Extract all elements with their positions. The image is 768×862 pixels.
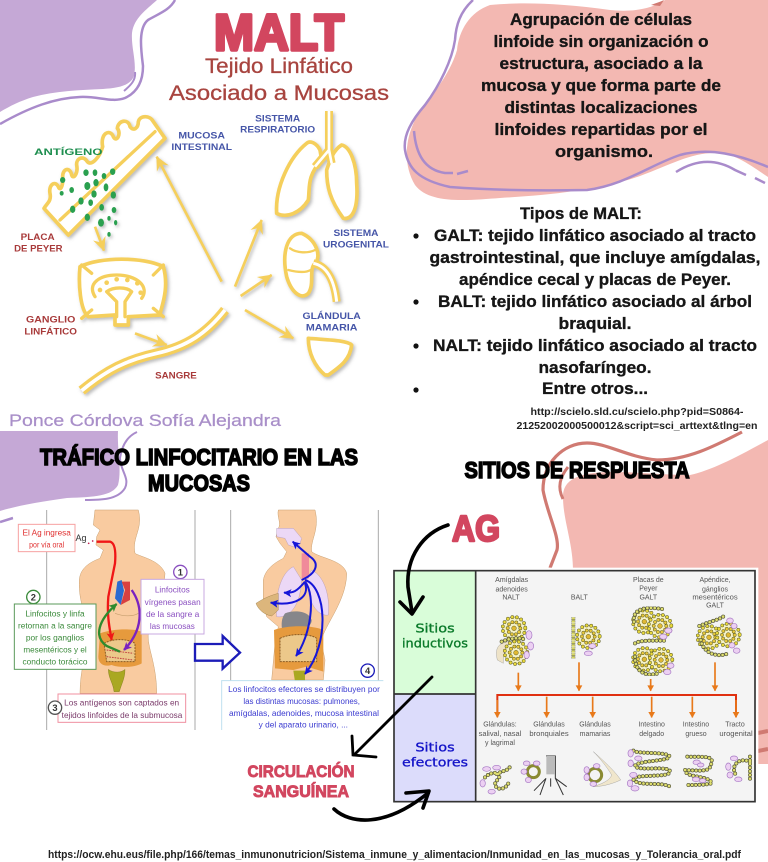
source link 1: http://scielo.sld.cu/scielo.php?pid=S0864- bbox=[530, 407, 744, 418]
icon: blood vessel bbox=[82, 310, 225, 391]
author name: Ponce Córdova Sofía Alejandra bbox=[9, 411, 282, 430]
column labels: Glándulas bbox=[579, 722, 611, 729]
diagram labels: SISTEMA bbox=[255, 114, 301, 124]
definition text: linfoide sin organización o bbox=[494, 32, 708, 51]
heart bbox=[115, 580, 138, 616]
column labels: BALT bbox=[571, 594, 589, 601]
callout: step 2: mesentéricos y el bbox=[23, 645, 87, 655]
label: inductive sites: inductivos bbox=[402, 636, 468, 650]
coloured arrows bbox=[97, 542, 140, 652]
callout: step 4: las distintas mucosas: pulmones, bbox=[243, 696, 360, 706]
label AG: AG bbox=[452, 508, 500, 549]
column labels: Amígdalas bbox=[495, 577, 529, 584]
definition text: organismo. bbox=[555, 142, 653, 161]
callout: step 1: 1 bbox=[178, 567, 183, 577]
diagram labels: SANGRE bbox=[155, 370, 197, 380]
callout: step 2 bbox=[14, 590, 96, 669]
column labels: GALT bbox=[639, 594, 658, 601]
MALT types list: gastrointestinal, que incluye amígdalas, bbox=[430, 248, 760, 267]
blue arrows bbox=[271, 542, 323, 674]
definition text: distintas localizaciones bbox=[504, 98, 698, 117]
label: blood circulation bbox=[248, 762, 354, 801]
callout: oral antigen: El Ag ingresa bbox=[22, 527, 71, 537]
column labels: grueso bbox=[685, 731, 707, 738]
purple blob lower-left bbox=[0, 431, 137, 522]
MALT types list: GALT: tejido linfático asociado al tracto bbox=[434, 226, 756, 245]
source link 1: 21252002000500012&script=sci_arttext&tlng=en bbox=[516, 421, 758, 432]
column labels: delgado bbox=[639, 731, 664, 738]
heading: lymphocyte traffic: TRÁFICO LINFOCITARIO EN LAS bbox=[40, 443, 358, 470]
large intestine bbox=[685, 757, 712, 785]
source link 1 bbox=[516, 407, 758, 432]
callout: step 4: y del aparato urinario, ... bbox=[259, 720, 348, 730]
big arrow bbox=[195, 636, 240, 669]
MALT types list: Entre otros... bbox=[542, 379, 648, 398]
appendix bbox=[698, 615, 740, 655]
subtitle: Asociado a Mucosas bbox=[169, 82, 389, 105]
callout: step 2: conducto torácico bbox=[22, 657, 88, 667]
column labels: Peyer bbox=[639, 586, 658, 593]
MALT types list: Tipos de MALT: bbox=[520, 204, 642, 223]
arrow: AG to inductive sites bbox=[400, 525, 448, 614]
purple blob top-left bbox=[0, 0, 175, 124]
callout: step 3: tejidos linfoides de la submucosa bbox=[62, 710, 183, 720]
source link 2: https://ocw.ehu.eus/file.php/166/temas_inmunonutricion/Sistema_inmune_y_alimentacion/Inmunidad_en_las_mucosas_y_Tolerancia_oral.pdf bbox=[48, 849, 741, 861]
subtitle bbox=[169, 55, 389, 105]
callout: step 3 bbox=[48, 694, 186, 722]
column labels: Glándulas: bbox=[483, 722, 517, 729]
MALT types list: braquial. bbox=[558, 314, 632, 333]
figure background bbox=[13, 510, 390, 731]
arrow: circulation to effector sites bbox=[334, 791, 429, 820]
intestine left bbox=[98, 629, 142, 692]
column labels: NALT bbox=[502, 594, 520, 601]
definition text bbox=[481, 10, 721, 161]
title MALT: MALT bbox=[214, 4, 344, 61]
column labels: bronquiales bbox=[529, 731, 569, 738]
label: blood circulation: SANGUÍNEA bbox=[253, 782, 349, 801]
BALT bbox=[573, 617, 600, 658]
definition text: Agrupación de células bbox=[510, 10, 692, 29]
callout: step 1: de la sangre a bbox=[146, 609, 200, 619]
arrows bbox=[95, 157, 293, 345]
icon: mammary gland bbox=[308, 338, 352, 375]
column labels: adenoides bbox=[496, 586, 528, 593]
effector tissue illustrations bbox=[480, 750, 750, 795]
MALT types list: nasofaríngeo. bbox=[538, 358, 652, 377]
callout: step 2: 2 bbox=[31, 592, 36, 602]
callout: step 4 bbox=[222, 664, 385, 731]
callout: oral antigen bbox=[18, 524, 93, 552]
column labels: urogenital bbox=[719, 731, 753, 738]
icon: lungs bbox=[277, 111, 357, 218]
column labels: y lagrimal bbox=[485, 740, 515, 747]
diagram labels: PLACA bbox=[21, 232, 55, 242]
label: inductive sites: Sitios bbox=[415, 622, 455, 636]
column labels: mesentéricos bbox=[692, 594, 738, 601]
grey lines bbox=[47, 510, 378, 730]
icon: intestinal mucosa bbox=[44, 117, 165, 235]
MALT types list: apéndice cecal y placas de Peyer. bbox=[459, 270, 731, 289]
column labels: Placas de bbox=[633, 577, 664, 584]
arrow: inductive sites to circulation bbox=[352, 677, 432, 757]
diagram labels: INTESTINAL bbox=[171, 142, 233, 152]
diagram labels: MAMARIA bbox=[306, 323, 358, 333]
column labels: GALT bbox=[706, 603, 725, 610]
diagram labels: GLÁNDULA bbox=[302, 310, 361, 321]
definition text: linfoides repartidas por el bbox=[494, 120, 708, 139]
heading: lymphocyte traffic bbox=[40, 443, 358, 496]
callout: step 2: por los ganglios bbox=[26, 633, 84, 643]
body right bbox=[263, 510, 347, 680]
label: blood circulation: CIRCULACIÓN bbox=[248, 762, 354, 781]
diagram labels: MUCOSA bbox=[178, 130, 226, 140]
figure: inductive and effector sites bbox=[390, 568, 758, 805]
salivary gland bbox=[480, 765, 510, 794]
callout: step 2: Linfocitos y linfa bbox=[25, 609, 85, 619]
column labels: Glándulas bbox=[533, 722, 565, 729]
column labels: Intestino bbox=[638, 722, 665, 729]
MALT types list: NALT: tejido linfático asociado al tracto bbox=[433, 336, 757, 355]
figure: lymphocyte traffic in the mucosa bbox=[13, 510, 390, 731]
icon: lymph node bbox=[79, 259, 166, 325]
figure frame bbox=[390, 568, 758, 805]
column labels bbox=[479, 577, 753, 747]
callout: step 1: vírgenes pasan bbox=[145, 597, 201, 607]
organs right bbox=[256, 528, 329, 682]
callout: oral antigen: Ag bbox=[75, 533, 86, 543]
small intestine bbox=[627, 750, 670, 791]
column labels: gánglios bbox=[702, 586, 729, 593]
callout: step 1 bbox=[141, 565, 204, 634]
bronchi bbox=[521, 756, 567, 795]
column labels: Apéndice, bbox=[699, 577, 731, 584]
column labels: Tracto bbox=[725, 722, 745, 729]
callout: oral antigen: por vía oral bbox=[29, 539, 64, 549]
antigen dots bbox=[60, 168, 117, 237]
mammary bbox=[584, 752, 621, 787]
diagram labels: LINFÁTICO bbox=[24, 325, 77, 336]
NALT bbox=[496, 617, 534, 664]
definition text: mucosa y que forma parte de bbox=[481, 76, 721, 95]
diagram labels: ANTÍGENO bbox=[34, 146, 103, 157]
diagram labels: DE PEYER bbox=[14, 244, 63, 254]
label: inductive sites bbox=[402, 622, 468, 650]
inductive tissue illustrations bbox=[496, 608, 740, 675]
pink blob lower-right bbox=[543, 432, 768, 764]
subtitle: Tejido Linfático bbox=[205, 55, 353, 78]
diagram labels: GANGLIO bbox=[26, 315, 75, 325]
callout: step 4: amígdalas, adenoides, mucosa intestinal bbox=[229, 708, 379, 718]
body left bbox=[79, 510, 165, 693]
pink blob top-right bbox=[405, 0, 768, 200]
Peyer patches bbox=[633, 608, 674, 675]
column labels: mamarias bbox=[580, 731, 611, 738]
callout: step 3: Los antígenos son captados en bbox=[64, 698, 180, 708]
callout: step 4: 4 bbox=[365, 666, 371, 676]
diagram labels bbox=[14, 114, 390, 380]
diagram labels: RESPIRATORIO bbox=[240, 125, 315, 135]
column labels: salival, nasal bbox=[479, 731, 522, 738]
icon: kidney bbox=[285, 233, 337, 302]
heading: response sites: SITIOS DE RESPUESTA bbox=[464, 457, 690, 483]
callout: step 1: las mucosas bbox=[150, 621, 195, 631]
heading: lymphocyte traffic: MUCOSAS bbox=[148, 470, 250, 496]
label: effector sites: Sitios bbox=[415, 741, 455, 755]
callout: step 2: retornan a la sangre bbox=[18, 621, 92, 631]
diagram: lymphocyte traffic anatomy map bbox=[44, 111, 357, 391]
column labels: Intestino bbox=[683, 722, 709, 729]
callout: step 1: Linfocitos bbox=[155, 585, 190, 595]
MALT types list: BALT: tejido linfático asociado al árbol bbox=[438, 292, 752, 311]
callout: step 4: Los linfocitos efectores se distribuyen por bbox=[228, 684, 380, 694]
diagram labels: UROGENITAL bbox=[323, 240, 390, 250]
urogenital tract bbox=[726, 756, 750, 782]
label: effector sites bbox=[402, 741, 468, 770]
label: effector sites: efectores bbox=[402, 756, 468, 770]
arrow tree bbox=[497, 662, 736, 717]
MALT types list bbox=[413, 204, 760, 398]
definition text: estructura, asociado a la bbox=[500, 54, 703, 73]
callout: step 3: 3 bbox=[52, 703, 58, 713]
diagram labels: SISTEMA bbox=[333, 228, 379, 238]
